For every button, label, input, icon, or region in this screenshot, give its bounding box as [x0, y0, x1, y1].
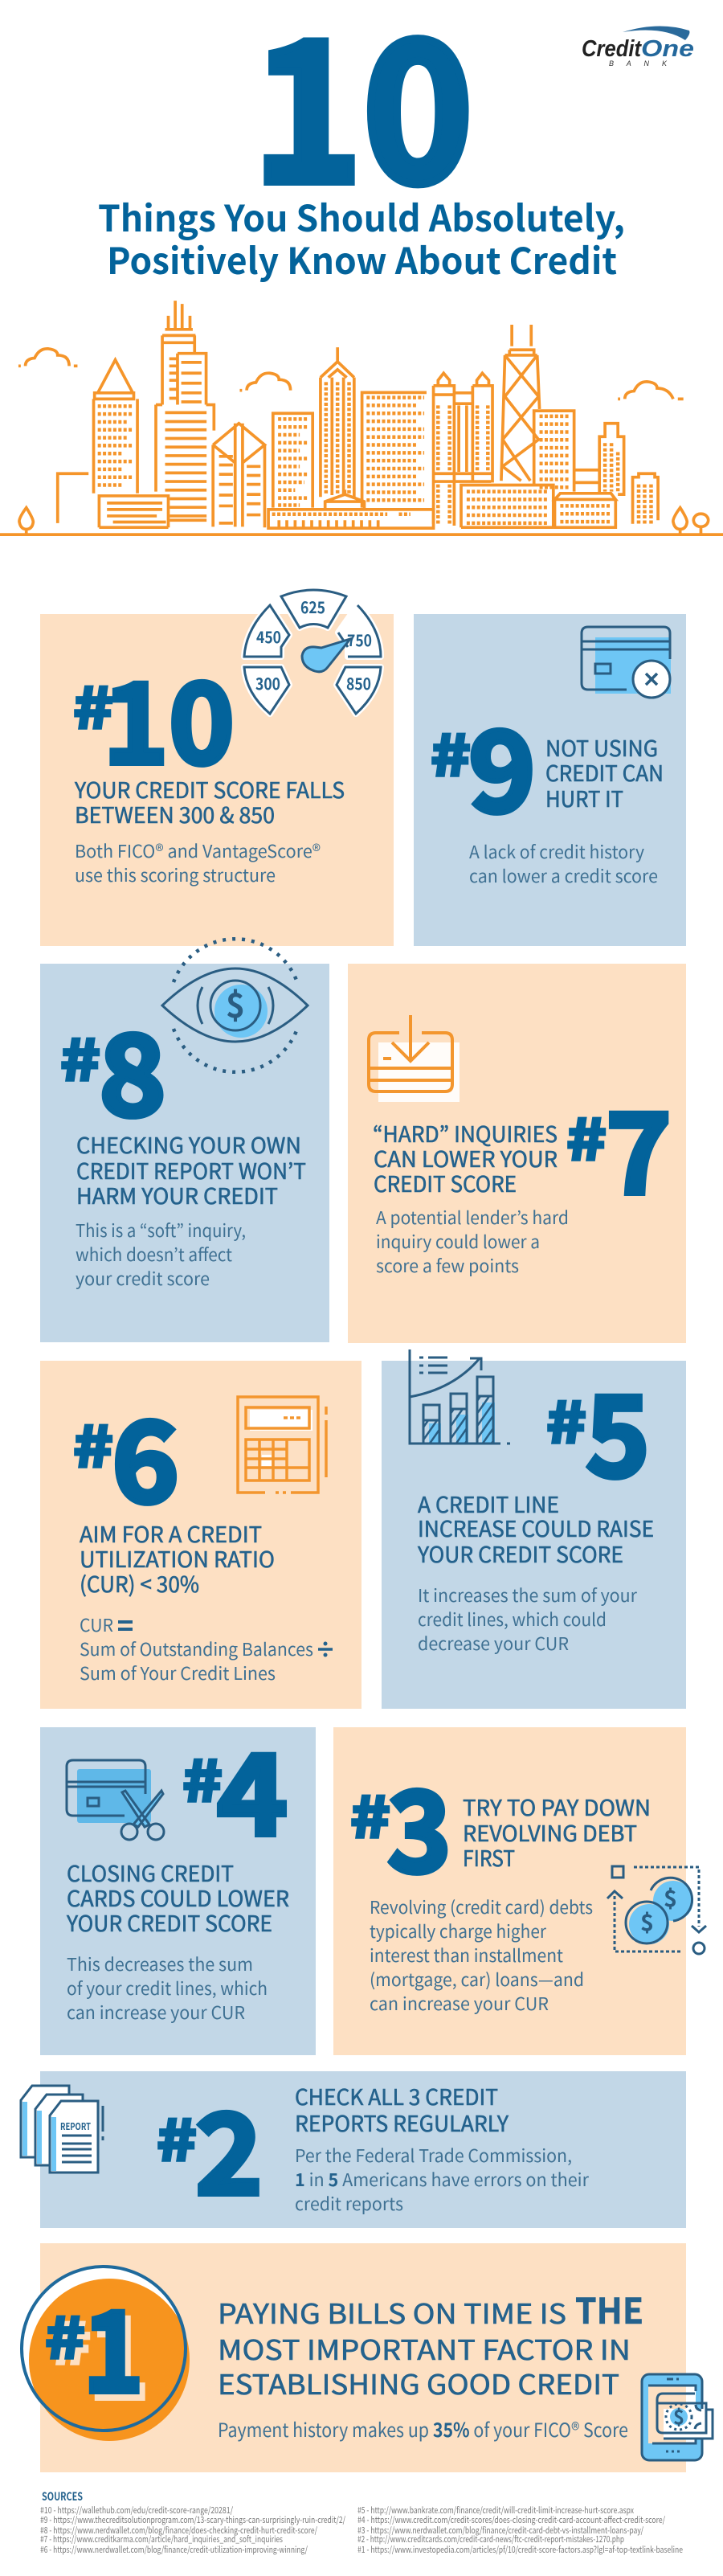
- logo: Credit One Bank: One: [641, 36, 694, 62]
- body text: use this scoring structure: [75, 862, 276, 887]
- number: #5: [546, 1348, 650, 1509]
- number: #4: #: [182, 1737, 223, 1818]
- body text: [76, 1217, 246, 1291]
- heading: (CUR) < 30%: [80, 1567, 199, 1599]
- badge: #1 circle: #: [51, 2300, 91, 2381]
- heading: CREDIT CAN: [545, 756, 664, 788]
- badge: #1 circle: #: [45, 2294, 85, 2375]
- heading: CREDIT SCORE: [374, 1167, 517, 1198]
- number: #6: [73, 1374, 179, 1535]
- heading: A CREDIT LINE: [418, 1488, 559, 1519]
- heading: [545, 731, 664, 813]
- number: #9: [431, 683, 536, 845]
- icon: credit score gauge: 750: [347, 628, 372, 651]
- heading: CLOSING CREDIT: [67, 1857, 234, 1888]
- body text: A lack of credit history: [469, 838, 645, 864]
- number: #7: #: [566, 1096, 607, 1177]
- icon: phone with wallet and dollar: $: [673, 2402, 684, 2430]
- body text: [376, 1204, 569, 1278]
- number: #6: #: [73, 1403, 113, 1484]
- title: [98, 190, 625, 285]
- number: #3: [350, 1743, 451, 1905]
- heading: [417, 1488, 654, 1569]
- heading: CARDS COULD LOWER: [67, 1882, 289, 1913]
- body text: [295, 2142, 589, 2216]
- number: #2: #: [157, 2096, 197, 2177]
- icon: credit score gauge: 450: [256, 625, 281, 648]
- number: #8: [60, 987, 166, 1149]
- panel: #1 paying bills on time: [22, 2243, 713, 2472]
- panel: #2 check all 3 reports: [21, 2066, 686, 2228]
- body text: which doesn’t affect: [76, 1241, 232, 1267]
- body text: It increases the sum of your: [418, 1582, 637, 1607]
- body text: [418, 1582, 637, 1656]
- badge: #1 circle: 1: [83, 2263, 144, 2425]
- heading: CHECK ALL 3 CREDIT: [295, 2080, 498, 2111]
- heading: [66, 1857, 289, 1938]
- heading: [76, 1128, 306, 1210]
- icon: eye with dollar sign: $: [226, 979, 245, 1028]
- number: #5: 5: [586, 1348, 650, 1509]
- heading: HURT IT: [545, 782, 623, 813]
- heading: INCREASE COULD RAISE: [418, 1512, 654, 1543]
- heading: CREDIT REPORT WON’T: [76, 1154, 306, 1186]
- heading: YOUR CREDIT SCORE: [66, 1906, 272, 1938]
- logo: Credit One Bank: Credit: [582, 36, 642, 62]
- number: #5: #: [546, 1378, 586, 1460]
- icon: coins and dotted cycle arrows: [607, 1866, 706, 1954]
- body text: [469, 838, 658, 888]
- number: #10: 10: [103, 635, 235, 797]
- number: #2: 2: [195, 2066, 263, 2227]
- body text: CUR formula: Sum of Your Credit Lines: [80, 1660, 276, 1685]
- sources: #8 - https://www.nerdwallet.com/blog/finance/does-checking-credit-hurt-credit-score/: [40, 2524, 318, 2537]
- badge: #1 circle: [22, 2263, 190, 2441]
- logo: Credit One Bank: [582, 26, 694, 68]
- body text: can increase your CUR: [67, 1999, 245, 2025]
- heading: [373, 1117, 558, 1198]
- panel: #8 checking your own report: [40, 939, 329, 1342]
- icon: stack of report pages: REPORT: [60, 2119, 91, 2133]
- heading: [218, 2283, 643, 2402]
- body text: CUR formula: [80, 1612, 333, 1685]
- sources: #10 - https://wallethub.com/edu/credit-score-range/20281/: [40, 2504, 234, 2517]
- heading: “HARD” INQUIRIES: [373, 1117, 558, 1149]
- body text: CUR formula: CUR: [80, 1612, 113, 1637]
- body text: (mortgage, car) loans—and: [370, 1966, 584, 1992]
- sources: #9 - https://www.thecreditsolutionprogram.com/13-scary-things-can-surprisingly-ruin-credit/2/: [40, 2513, 346, 2526]
- sources: [40, 2488, 683, 2556]
- heading: BETWEEN 300 & 850: [75, 798, 275, 829]
- sources: #6 - https://www.nerdwallet.com/blog/finance/credit-utilization-improving-winning/: [40, 2543, 308, 2556]
- heading: YOUR CREDIT SCORE: [417, 1538, 623, 1569]
- skyline illustration: [0, 301, 723, 534]
- panel: #3 pay down revolving debt: [333, 1727, 706, 2055]
- heading: UTILIZATION RATIO: [80, 1542, 275, 1574]
- icon: card and scissors: [67, 1760, 164, 1840]
- title: Things You Should Absolutely,: [98, 190, 625, 242]
- icon: coins and dotted cycle arrows: $: [640, 1906, 654, 1938]
- body text: can increase your CUR: [370, 1990, 549, 2016]
- number: #3: #: [350, 1773, 390, 1854]
- panel: #10 credit score range: [40, 590, 394, 946]
- heading: CAN LOWER YOUR: [374, 1142, 558, 1173]
- body text: of your credit lines, which: [67, 1975, 268, 2001]
- body text: decrease your CUR: [418, 1630, 569, 1656]
- title: Positively Know About Credit: [107, 232, 617, 285]
- heading: MOST IMPORTANT FACTOR IN: [218, 2328, 631, 2368]
- body text: A potential lender’s hard: [376, 1204, 569, 1230]
- sources: #7 - https://www.creditkarma.com/article/hard_inquiries_and_soft_inquiries: [40, 2533, 283, 2545]
- icon: card with download arrow: [369, 1015, 460, 1102]
- number: #9: #: [431, 711, 471, 792]
- icon: credit score gauge: [244, 590, 381, 714]
- heading: ESTABLISHING GOOD CREDIT: [218, 2363, 619, 2402]
- number: #10: #: [73, 664, 113, 745]
- body text: can lower a credit score: [469, 862, 658, 888]
- heading: REPORTS REGULARLY: [295, 2107, 509, 2138]
- number: #6: 6: [112, 1374, 179, 1535]
- heading: [463, 1791, 651, 1873]
- heading: REVOLVING DEBT: [463, 1816, 637, 1848]
- body text: credit reports: [295, 2190, 403, 2216]
- number: #4: [182, 1706, 288, 1868]
- body text: score a few points: [376, 1252, 519, 1278]
- icon: eye with dollar sign: [162, 939, 308, 1072]
- sources: #3 - https://www.nerdwallet.com/blog/finance/credit-card-debt-vs-installment-loans-pay/: [357, 2524, 644, 2537]
- body text: [75, 838, 321, 887]
- panel: #6 credit utilization ratio: [40, 1361, 362, 1709]
- sources: SOURCES: [42, 2488, 83, 2504]
- number: #7: 7: [606, 1065, 672, 1227]
- badge: #1 circle: 1: [88, 2270, 149, 2431]
- body text: Both FICO® and VantageScore®: [75, 838, 321, 863]
- body text: [370, 1894, 593, 2016]
- sources: #5 - http://www.bankrate.com/finance/credit/will-credit-limit-increase-hurt-score.aspx: [357, 2504, 634, 2517]
- body text: CUR formula: Sum of Outstanding Balances: [80, 1636, 313, 1661]
- body text: typically charge higher: [370, 1918, 546, 1943]
- icon: credit score gauge: 625: [300, 595, 325, 618]
- number: #3: 3: [387, 1743, 451, 1905]
- icon: credit score gauge: 300: [255, 671, 280, 694]
- heading: TRY TO PAY DOWN: [463, 1791, 651, 1822]
- number: #8: 8: [99, 987, 166, 1149]
- heading: [80, 1517, 275, 1599]
- body text: inquiry could lower a: [376, 1228, 540, 1254]
- logo: Credit One Bank: B A N K: [609, 59, 668, 68]
- body text: This is a “soft” inquiry,: [76, 1217, 246, 1243]
- heading: HARM YOUR CREDIT: [76, 1179, 278, 1210]
- icon: coins and dotted cycle arrows: $: [664, 1882, 677, 1914]
- number: #2: [157, 2066, 263, 2227]
- number: #4: 4: [217, 1706, 288, 1868]
- sources: #2 - http://www.creditcards.com/credit-card-news/ftc-credit-report-mistakes-1270.php: [357, 2533, 624, 2545]
- body text: Per the Federal Trade Commission,: [295, 2142, 572, 2168]
- icon: credit card with X: [582, 627, 671, 698]
- icon: bar chart with rising arrow: [410, 1349, 510, 1444]
- panel: #9 not using credit: [414, 614, 686, 946]
- heading: THE: [575, 2283, 643, 2334]
- panel: #4 closing credit cards: [40, 1706, 316, 2055]
- icon: credit score gauge: 850: [346, 671, 371, 694]
- body text: interest than installment: [370, 1942, 563, 1968]
- heading: NOT USING: [545, 731, 658, 763]
- heading: PAYING BILLS ON TIME IS: [218, 2292, 566, 2332]
- heading: [74, 773, 345, 829]
- heading: [295, 2080, 509, 2138]
- heading: CHECKING YOUR OWN: [76, 1128, 301, 1160]
- panel: #7 hard inquiries: [348, 964, 686, 1343]
- icon: phone with wallet and dollar: [642, 2374, 713, 2460]
- body text: credit lines, which could: [418, 1606, 607, 1632]
- body text: [67, 1951, 268, 2025]
- body text: 1 in 5 Americans have errors on their: [295, 2166, 589, 2192]
- number: #8: #: [60, 1016, 100, 1097]
- icon: calculator: [238, 1397, 326, 1493]
- number: #9: 9: [468, 683, 536, 845]
- heading: AIM FOR A CREDIT: [80, 1517, 262, 1549]
- icon: stack of report pages: [21, 2086, 103, 2173]
- body text: your credit score: [76, 1265, 210, 1291]
- heading: YOUR CREDIT SCORE FALLS: [74, 773, 345, 805]
- heading: FIRST: [463, 1841, 515, 1873]
- panel: #5 credit line increase: [382, 1348, 686, 1709]
- number: #7: [566, 1065, 672, 1227]
- body text: This decreases the sum: [67, 1951, 253, 1976]
- body text: Payment history makes up 35% of your FICO® Score: [218, 2414, 628, 2443]
- body text: Revolving (credit card) debts: [370, 1894, 593, 1919]
